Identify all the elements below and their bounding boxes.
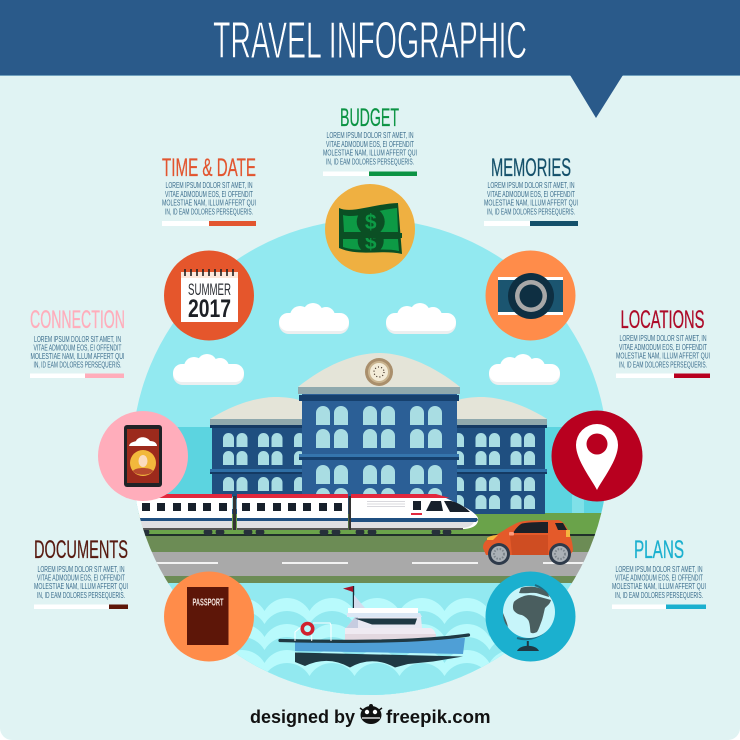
section: memories xyxy=(484,154,578,226)
side roofs xyxy=(210,397,305,419)
lifebuoy xyxy=(302,624,313,634)
section: budget xyxy=(323,104,417,176)
section: connection xyxy=(30,306,125,378)
section: budget: MOLESTIAE NAM, ILLUM AFFERT QUI xyxy=(323,148,417,158)
section: memories: LOREM IPSUM DOLOR SIT AMET, IN xyxy=(488,180,574,190)
clock xyxy=(365,358,393,386)
cabin xyxy=(345,628,436,634)
circle icon: budget: $ xyxy=(365,211,377,234)
cloud right xyxy=(489,354,560,385)
section: memories: MEMORIES xyxy=(491,154,571,182)
mast and flag xyxy=(353,586,354,608)
cloud left xyxy=(173,354,244,385)
section: budget: VITAE ADMODUM EOS, EI OFFENDIT xyxy=(326,139,414,149)
section: documents xyxy=(34,536,128,609)
carriage 1 xyxy=(136,498,232,529)
train xyxy=(132,494,478,536)
carriage 2 xyxy=(237,498,348,518)
railing xyxy=(295,623,331,641)
section: documents: IN, ID EAM DOLORES PERSEQUERIS. xyxy=(37,590,125,600)
central scene xyxy=(130,215,610,700)
cloud top left xyxy=(279,303,349,334)
section: connection: CONNECTION xyxy=(30,306,125,334)
circle icon: passport xyxy=(164,572,254,662)
car xyxy=(483,520,573,565)
section: connection: MOLESTIAE NAM, ILLUM AFFERT QUI xyxy=(30,351,124,361)
section: time and date: LOREM IPSUM DOLOR SIT AMET, IN xyxy=(166,180,252,190)
side wings xyxy=(210,419,547,425)
section: time and date: TIME & DATE xyxy=(162,154,256,182)
water waves xyxy=(235,598,504,695)
circle icon: camera xyxy=(486,250,576,340)
icon: freepik logo xyxy=(360,704,382,724)
section: memories: MOLESTIAE NAM, ILLUM AFFERT QUI xyxy=(484,198,578,208)
section: budget: LOREM IPSUM DOLOR SIT AMET, IN xyxy=(326,130,414,140)
section: connection: VITAE ADMODUM EOS, EI OFFENDIT xyxy=(34,342,122,352)
section: time and date: VITAE ADMODUM EOS, EI OFFENDIT xyxy=(165,189,253,199)
circle icon: calendar: SUMMER xyxy=(188,280,231,299)
section: memories: IN, ID EAM DOLORES PERSEQUERIS. xyxy=(487,206,575,216)
circle icon: budget: $ xyxy=(365,231,377,254)
section: connection: IN, ID EAM DOLORES PERSEQUERIS. xyxy=(34,360,122,370)
section: documents: LOREM IPSUM DOLOR SIT AMET, IN xyxy=(38,564,124,574)
footer credit: freepik.com xyxy=(386,707,490,727)
section: time and date: MOLESTIAE NAM, ILLUM AFFERT QUI xyxy=(162,198,256,208)
section: locations xyxy=(616,306,710,378)
section: documents: MOLESTIAE NAM, ILLUM AFFERT QUI xyxy=(34,581,128,591)
footer credit: designed by xyxy=(250,707,355,727)
ground: grass, rails, road, water xyxy=(138,513,602,611)
circle icon: globe xyxy=(486,572,576,662)
footer credit xyxy=(250,704,490,727)
central roof xyxy=(298,353,460,387)
circle icon: calendar: 2017 xyxy=(188,295,231,323)
sky xyxy=(130,215,610,515)
section: budget: IN, ID EAM DOLORES PERSEQUERIS. xyxy=(326,156,414,166)
circle icon: calendar xyxy=(164,250,254,340)
locomotive xyxy=(351,498,478,529)
circle icon: passport: PASSPORT xyxy=(192,598,224,608)
circle icon: phone connection xyxy=(98,411,188,501)
boat xyxy=(280,586,468,668)
circle icon: budget xyxy=(325,184,415,274)
section: time and date xyxy=(162,154,256,226)
header banner xyxy=(0,0,740,118)
section: documents: VITAE ADMODUM EOS, EI OFFENDIT xyxy=(37,572,125,582)
circle icon: location pin xyxy=(552,410,642,502)
section: plans xyxy=(612,536,706,609)
building xyxy=(210,353,547,514)
section: budget: BUDGET xyxy=(340,104,399,132)
horizon band xyxy=(130,427,610,515)
section: time and date: IN, ID EAM DOLORES PERSEQUERIS. xyxy=(165,206,253,216)
couplers xyxy=(233,496,236,530)
cloud top right xyxy=(386,303,456,334)
hull xyxy=(295,638,465,654)
section: connection: LOREM IPSUM DOLOR SIT AMET, IN xyxy=(34,334,121,344)
section: plans: PLANS xyxy=(634,536,684,564)
section: memories: VITAE ADMODUM EOS, EI OFFENDIT xyxy=(487,189,575,199)
wheels xyxy=(140,528,452,536)
train windows xyxy=(142,503,342,511)
central block xyxy=(298,387,460,394)
section: documents: DOCUMENTS xyxy=(34,536,128,564)
